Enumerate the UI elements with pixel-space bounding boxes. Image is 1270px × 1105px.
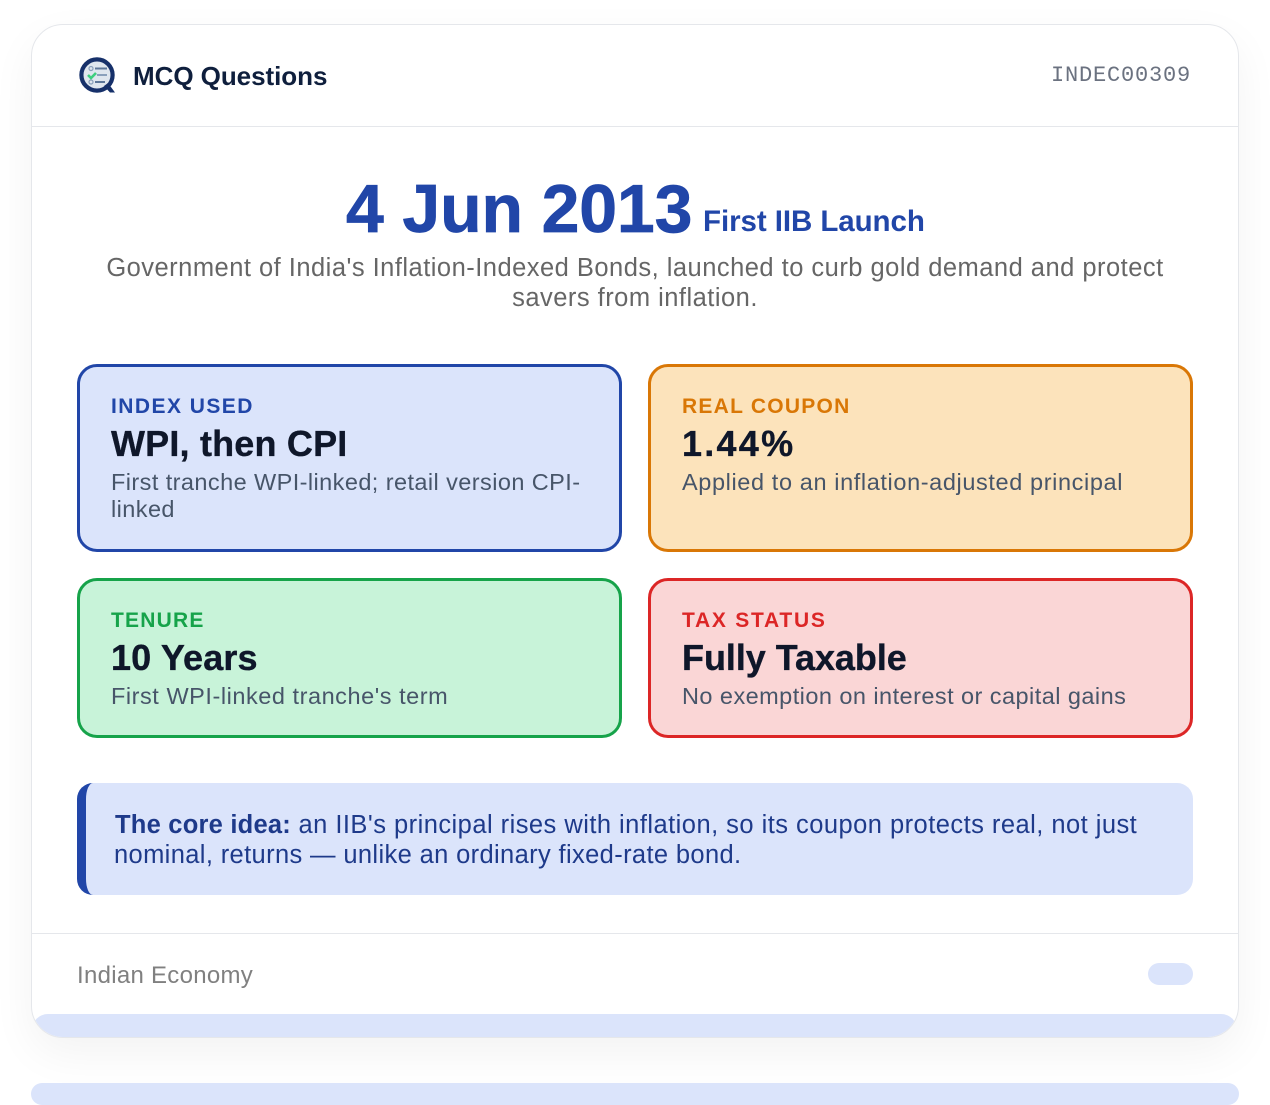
footer divider [32, 932, 1238, 934]
description: index used [111, 469, 580, 522]
description: real coupon: Applied to an inflation-adjusted principal [682, 469, 1123, 495]
bottom accent bar [32, 1014, 1237, 1038]
question code: INDEC00309 [1051, 63, 1191, 88]
label: tax status: TAX STATUS [682, 609, 827, 632]
panel: index used [77, 364, 622, 552]
intro text [106, 254, 1164, 312]
panel: tax status [648, 578, 1193, 738]
callout text [114, 811, 1137, 869]
label: index used: INDEX USED [111, 395, 254, 418]
description: index used: linked [111, 496, 175, 522]
intro text: Government of India's Inflation-Indexed Bonds, launched to curb gold demand and protect [106, 254, 1164, 282]
footer category: Indian Economy [77, 962, 253, 989]
value: 1.44%: 1.44% [682, 423, 795, 464]
title: subtitle: First IIB Launch [703, 205, 925, 238]
label: tenure: TENURE [111, 609, 205, 632]
footer pill [1148, 963, 1193, 985]
panel: tenure [77, 578, 622, 738]
description: tenure: First WPI-linked tranche's term [111, 683, 448, 709]
value: 10 Years: 10 Years [111, 637, 258, 678]
description: tax status: No exemption on interest or capital gains [682, 683, 1126, 709]
title: date: 4 Jun 2013 [346, 171, 692, 247]
icon: MCQ logo [79, 57, 115, 93]
intro text: savers from inflation. [512, 284, 758, 312]
callout text: The core idea: an IIB's principal rises with inflation, so its coupon protects real, not just [115, 811, 1137, 839]
header divider [32, 126, 1238, 127]
label: real coupon: REAL COUPON [682, 395, 851, 418]
brand name: MCQ Questions [133, 61, 327, 91]
description: index used: First tranche WPI-linked; retail version CPI- [111, 469, 580, 495]
callout text: nominal, returns — unlike an ordinary fixed-rate bond. [114, 841, 742, 869]
value: WPI, then CPI: WPI, then CPI [111, 423, 347, 464]
value: fully taxable: Fully Taxable [682, 637, 907, 678]
lower bar [31, 1083, 1239, 1105]
callout: core idea [77, 783, 1193, 895]
panel: real coupon [648, 364, 1193, 552]
